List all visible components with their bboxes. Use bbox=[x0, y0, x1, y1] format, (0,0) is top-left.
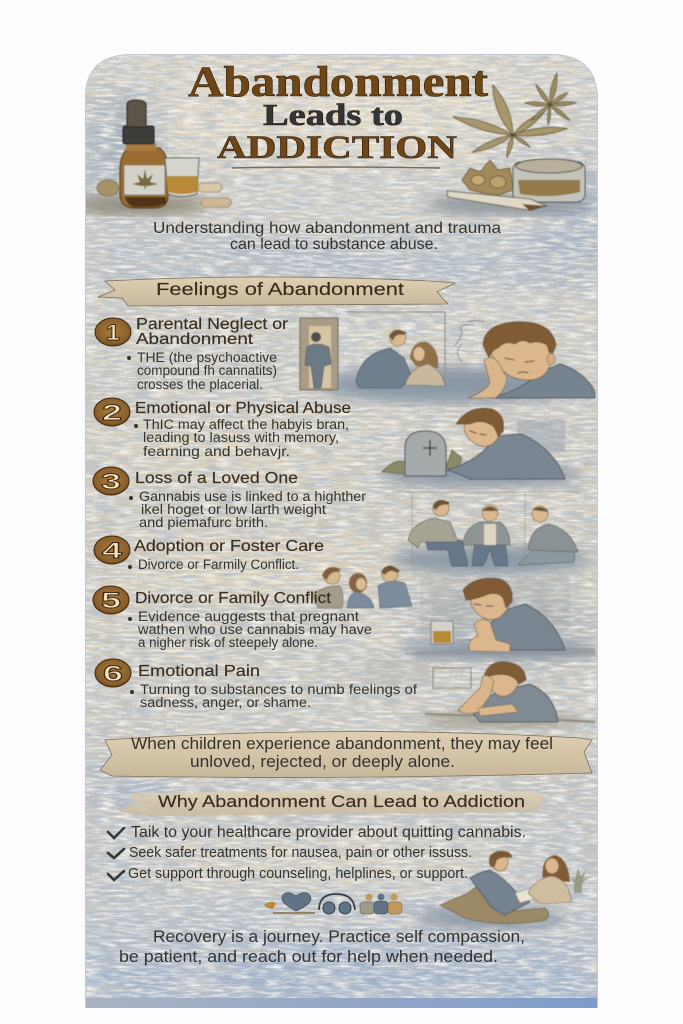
item 1 heading: Parental Neglect or bbox=[136, 316, 289, 333]
item 1 heading: Abandonment bbox=[136, 331, 254, 348]
item 1 heading bbox=[136, 316, 289, 348]
badge 2: 2 bbox=[102, 400, 122, 425]
check item 1: Taik to your healthcare provider about quitting cannabis. bbox=[131, 824, 526, 841]
subtitle: Understanding how abandonment and trauma bbox=[153, 220, 501, 237]
icon: joint bbox=[447, 191, 546, 211]
icon: headphones bbox=[319, 894, 355, 914]
icon: glass of liquor bbox=[165, 158, 199, 196]
illustration: family conflict bbox=[312, 566, 412, 608]
title: ADDICTION bbox=[217, 130, 457, 166]
item 6 text: Turning to substances to numb feelings of bbox=[140, 682, 417, 697]
illustration: boy at table with drink bbox=[405, 577, 595, 655]
illustration: parent leaving through door bbox=[300, 312, 445, 390]
banner: when children experience abandonment bbox=[100, 731, 592, 777]
item 6 text bbox=[130, 682, 417, 710]
item 2 text: leading to lasuss with memory, bbox=[143, 430, 339, 445]
item 5 heading: Divorce or Family Conflict bbox=[135, 590, 332, 607]
closing message: Recovery is a journey. Practice self compassion, bbox=[153, 928, 525, 946]
item 2 bbox=[94, 398, 351, 459]
check item 3: Get support through counseling, helplines, or support. bbox=[128, 865, 468, 882]
check item 2: Seek safer treatments for nausea, pain or other issuss. bbox=[129, 844, 472, 861]
item 5 bbox=[93, 586, 372, 650]
item 6 text: sadness, anger, or shame. bbox=[140, 695, 311, 710]
item 3 heading: Loss of a Loved One bbox=[135, 470, 298, 487]
badge 3: 3 bbox=[101, 469, 121, 494]
banner: feelings of abandonment bbox=[98, 277, 455, 306]
illustration: boy at gravestone bbox=[382, 408, 565, 479]
item 5 text: Evidence auggests that pregnant bbox=[138, 609, 359, 624]
icon: buds bbox=[462, 160, 514, 196]
title bbox=[188, 59, 489, 166]
banner: why abandonment can lead to addiction bbox=[118, 790, 545, 816]
badge 1: 1 bbox=[106, 320, 120, 345]
item 1 text: compound fh cannatits) bbox=[137, 363, 277, 378]
item 5 text: wathen who use cannabis may have bbox=[137, 622, 372, 637]
illustration: sad boy with hand on cheek bbox=[455, 320, 595, 398]
title underline bbox=[232, 167, 440, 168]
item 2 text bbox=[134, 417, 349, 459]
item 1 text bbox=[127, 350, 277, 392]
panel: textured card bbox=[60, 54, 625, 1008]
illustration: three men talking bbox=[392, 492, 580, 566]
item 6 heading: Emotional Pain bbox=[138, 663, 260, 680]
badge 4 bbox=[94, 536, 130, 564]
banner: when children experience abandonment: When children experience abandonment, they may feel bbox=[131, 735, 553, 753]
subtitle bbox=[153, 220, 501, 253]
item 3 text: Gannabis use is linked to a highther bbox=[139, 489, 367, 504]
item 1 text: THE (the psychoactive bbox=[137, 350, 277, 365]
illustration: boy slumped at table bbox=[365, 660, 595, 722]
illustration: counseling session bbox=[415, 851, 590, 929]
item 4 bbox=[94, 536, 324, 572]
badge 5: 5 bbox=[101, 588, 121, 613]
item 2 text: fearning and behavjr. bbox=[143, 444, 290, 459]
icon: jar bbox=[513, 159, 585, 202]
title: Leads to bbox=[263, 97, 403, 132]
item 4 heading: Adoption or Foster Care bbox=[134, 538, 324, 555]
item 5 text: a nigher risk of steepely alone. bbox=[138, 635, 318, 650]
badge 5 bbox=[93, 586, 129, 614]
illustration: arguing couple bbox=[356, 330, 445, 388]
subtitle: can lead to substance abuse. bbox=[230, 236, 438, 253]
item 3 text bbox=[129, 489, 367, 530]
banner: feelings of abandonment: Feelings of Abandonment bbox=[156, 279, 404, 299]
item 2 text: ThIC may affect the habyis bran, bbox=[143, 417, 349, 432]
icon: capsules and buds left bbox=[97, 180, 231, 207]
checklist bbox=[108, 824, 526, 882]
closing message bbox=[119, 928, 525, 966]
banner: when children experience abandonment: unloved, rejected, or deeply alone. bbox=[190, 753, 455, 771]
item 1 text: crosses the placerial. bbox=[137, 377, 263, 392]
banner: why abandonment can lead to addiction: Why Abandonment Can Lead to Addiction bbox=[158, 793, 525, 811]
item 6 bbox=[95, 659, 417, 710]
badge 3 bbox=[93, 467, 129, 495]
title: Abandonment bbox=[188, 59, 489, 106]
item 5 text bbox=[128, 609, 372, 650]
badge 6: 6 bbox=[103, 661, 123, 686]
badge 1 bbox=[95, 318, 131, 346]
scene shadows bbox=[70, 195, 210, 215]
item 3 text: and piemafurc brith. bbox=[139, 515, 268, 530]
item 3 bbox=[93, 467, 367, 530]
item 4 text: Divorce or Farmily Conflict. bbox=[138, 557, 299, 572]
badge 6 bbox=[95, 659, 131, 687]
icon: large cannabis leaf bbox=[452, 83, 568, 158]
badge 4: 4 bbox=[102, 538, 123, 563]
closing message: be patient, and reach out for help when needed. bbox=[119, 948, 498, 966]
icons: heart, headphones, community bbox=[264, 892, 402, 914]
item 1 bbox=[95, 316, 289, 392]
item 2 heading: Emotional or Physical Abuse bbox=[135, 400, 351, 417]
icon: heart bbox=[264, 892, 315, 913]
icon: small cannabis leaf bbox=[525, 72, 576, 125]
icon: dropper bottle bbox=[120, 100, 168, 208]
icon: people group bbox=[360, 894, 402, 914]
item 3 text: ikel hoget or low larth weight bbox=[141, 502, 326, 517]
badge 2 bbox=[94, 398, 130, 426]
